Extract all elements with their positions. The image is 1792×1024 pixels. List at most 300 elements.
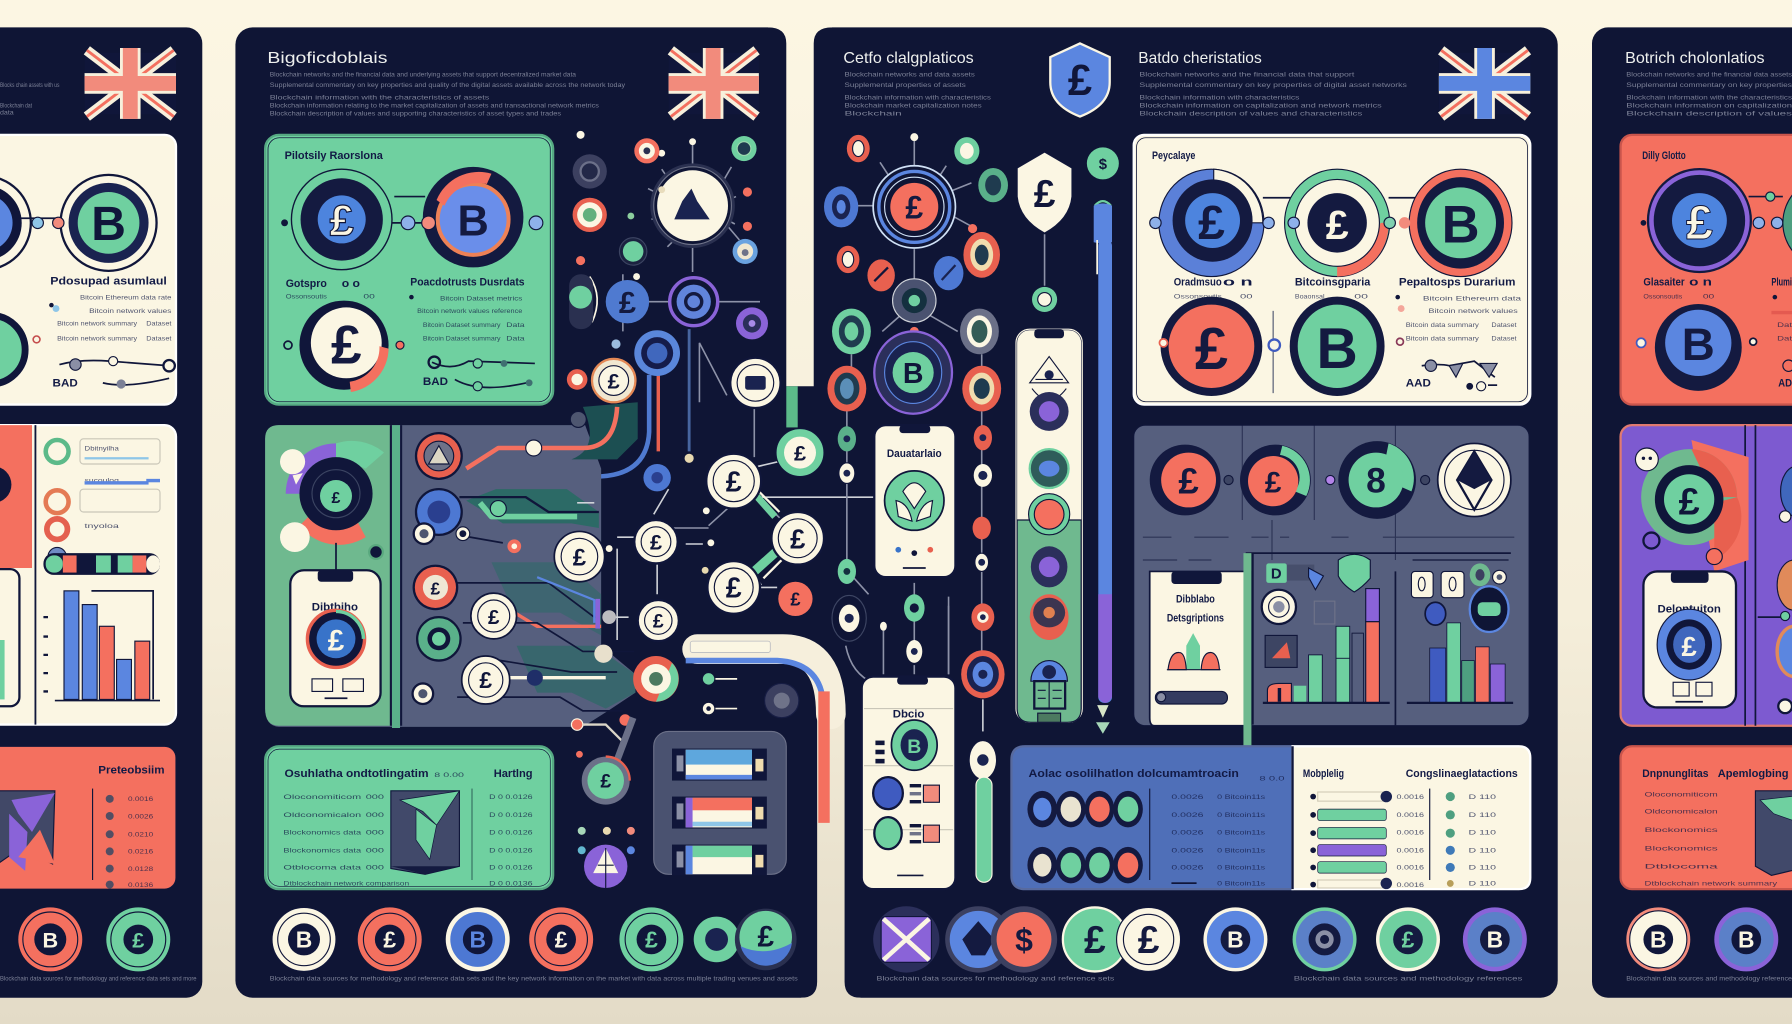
coin: green pill bbox=[569, 274, 597, 329]
rows: Dtblockchain network summary bbox=[1645, 881, 1778, 888]
coin: purple bbox=[1463, 907, 1527, 971]
title: Pilotsily Raorslona bbox=[285, 150, 383, 162]
coin: blue pound bbox=[291, 169, 392, 270]
cream value columns: D 110 bbox=[1469, 794, 1496, 801]
heading: table: 8 0.0 bbox=[1259, 776, 1285, 783]
connector: tail bbox=[571, 714, 633, 760]
coin: sat green L bbox=[832, 309, 871, 354]
coin: cream low: £ bbox=[479, 667, 492, 693]
text: sheet B left intro: Blockchain information with characteristics bbox=[845, 94, 991, 101]
coin bbox=[446, 907, 510, 971]
panel: cream coins bbox=[0, 135, 176, 405]
dots grid bbox=[578, 827, 635, 854]
phone: sheet B central bbox=[874, 425, 955, 577]
phone: Dibblabo bbox=[1176, 593, 1215, 605]
cube icon bbox=[0, 791, 55, 871]
nodes: around hub bbox=[627, 138, 752, 231]
strip: green channel end bbox=[786, 386, 798, 427]
text: coin labels: Ossonsoutis bbox=[1174, 293, 1222, 300]
panel: coral coins bbox=[1621, 135, 1792, 405]
text: sheet B right intro: Supplemental commentary on key properties of digital asset networks bbox=[1139, 82, 1407, 89]
text: sheet B left intro: Supplemental properties of assets bbox=[845, 82, 966, 89]
coin: green s: $ bbox=[1099, 157, 1108, 173]
panel: server stack bbox=[654, 731, 786, 875]
list rows bbox=[46, 439, 160, 566]
phone: sheet B lower bbox=[862, 677, 955, 889]
icons on tall phone bbox=[1029, 357, 1070, 722]
coin: small bbox=[1643, 533, 1722, 565]
text: sheet B left intro: Blockchain networks and data assets bbox=[845, 72, 975, 79]
connector bbox=[1641, 192, 1783, 229]
cream value columns: 0.0016 bbox=[1397, 794, 1424, 801]
text: sheet B right intro: Blockchain information with characteristics bbox=[1139, 94, 1299, 101]
cream bars bbox=[1310, 791, 1392, 889]
table right: D 0 0.0126 bbox=[489, 848, 533, 855]
coin: blue bbox=[416, 489, 462, 535]
panel: right cropped sheet bbox=[1592, 27, 1792, 998]
mini flow: BAD bbox=[53, 377, 78, 389]
text: labels: Dat bbox=[1777, 336, 1792, 343]
table left: 000 bbox=[366, 848, 384, 855]
icon: shield small bbox=[1017, 152, 1072, 233]
table left: Blockonomics data bbox=[283, 829, 361, 836]
text: sheet B left intro: Blockchain market capitalization notes bbox=[845, 102, 982, 109]
coin: purple green big bbox=[874, 331, 952, 414]
table right: D 0 0.0126 bbox=[489, 865, 533, 872]
text: left sheet intro: Blocks chain assets with us bbox=[0, 82, 59, 89]
phone: dial: £ bbox=[328, 624, 345, 657]
cream value columns: 0.0016 bbox=[1397, 848, 1424, 855]
phone bbox=[1643, 571, 1736, 707]
coin: coral: $ bbox=[1015, 922, 1033, 958]
phone list bbox=[873, 720, 939, 875]
coin: blue bitcoin: B bbox=[1682, 319, 1715, 370]
table rows: 0.0210 bbox=[128, 832, 153, 839]
table right: D 0 0.0126 bbox=[489, 812, 533, 819]
table blue rows: 0.0026 bbox=[1171, 812, 1204, 819]
nodes: vertical right bbox=[974, 425, 992, 487]
text: coin labels: Boaonsal bbox=[1295, 293, 1325, 300]
coin: cream dark pound: £ bbox=[1326, 202, 1349, 248]
text: sheet A intro: Supplemental commentary on key properties and quality of the digital assets available across the network today bbox=[270, 82, 626, 89]
bar chart: B left bbox=[1243, 553, 1511, 747]
phone: tall bbox=[1016, 329, 1082, 722]
coin: cream low bbox=[462, 656, 510, 704]
phone: sheet B lower: Dbcio bbox=[893, 709, 924, 721]
title: Osuhlatha ondtotlingatim bbox=[285, 768, 429, 780]
coin: purple green big: B bbox=[903, 358, 923, 390]
coin group bottom bbox=[1027, 847, 1143, 883]
text: right sheet intro: Blockchain information with the characteristics bbox=[1626, 94, 1792, 101]
text: labels: 00 bbox=[1703, 293, 1715, 300]
table left: Blockonomics data bbox=[283, 848, 361, 855]
mini flow: AAD bbox=[1406, 377, 1431, 389]
title bbox=[285, 768, 533, 780]
text: coin labels: 00 bbox=[363, 293, 375, 300]
coin: center left: £ bbox=[650, 530, 662, 555]
coin: blue pound bbox=[1159, 169, 1264, 277]
coin: blue pound: £ bbox=[330, 197, 354, 245]
coin: green vault bbox=[1338, 441, 1416, 519]
nodes: below pipe bbox=[703, 673, 737, 714]
footer: sheet A: Blockchain data sources for methodology and reference data sets and the key network information on the market with data across multiple trading venues and assets bbox=[270, 976, 798, 983]
coin: blue pound: £ bbox=[1198, 197, 1225, 250]
table left: 000 bbox=[366, 812, 384, 819]
text: coin details: Bitcoin network summary bbox=[57, 321, 138, 328]
rows: Dtblocoma bbox=[1645, 864, 1718, 871]
coin: cream A: £ bbox=[573, 545, 587, 572]
text: sheet B right intro: Blockchain description of values and characteristics bbox=[1139, 110, 1362, 117]
table left: 000 bbox=[366, 829, 384, 836]
text: coin labels: o o bbox=[342, 278, 360, 290]
rows bbox=[1645, 792, 1778, 888]
coin: blue leaf bbox=[945, 906, 1011, 973]
flag: sheet A bbox=[669, 48, 759, 119]
coin: blue ring bbox=[1293, 907, 1357, 971]
bar: lower green vertical bbox=[969, 699, 997, 882]
panel: left cropped sheet bbox=[0, 27, 202, 998]
text: sheet B right intro: Blockchain networks and the financial data that support bbox=[1139, 72, 1355, 79]
coin: blue B: B bbox=[1227, 926, 1244, 952]
coin: blue B bbox=[1203, 907, 1267, 971]
text: coin labels: Data bbox=[506, 336, 525, 343]
sheet: centre double panel bbox=[235, 11, 1558, 1024]
speech bubbles bbox=[280, 449, 383, 559]
coin: red dot bbox=[567, 369, 587, 390]
heading: table: Mobplelig bbox=[1303, 768, 1344, 780]
text: right sheet intro: Blockchain networks and the financial data assets bbox=[1626, 72, 1792, 79]
coin: navy eye bbox=[832, 595, 866, 641]
footer: left: Blockchain data sources for methodology and reference data sets and more bbox=[0, 976, 197, 983]
coin: blue pound: £ bbox=[619, 285, 636, 320]
text: labels bbox=[1643, 277, 1792, 343]
text: coin labels: 00 bbox=[1240, 293, 1253, 300]
coin: £ bbox=[555, 926, 568, 952]
coin: coral: £ bbox=[790, 589, 801, 610]
title: Dilly Glotto bbox=[1642, 150, 1686, 162]
coin: coral pound: £ bbox=[1195, 315, 1228, 382]
coin: slate dial bbox=[765, 683, 799, 718]
coins: sheet A bottom row bbox=[272, 907, 797, 971]
coin: coral bbox=[991, 906, 1057, 973]
heading: table bbox=[1029, 768, 1518, 783]
coin: green pound bbox=[776, 429, 824, 477]
pipe: cream curved with stripes bbox=[686, 641, 831, 823]
bar chart: B right bbox=[1407, 560, 1513, 703]
heading: right sheet: Botrich cholonlatios bbox=[1625, 50, 1765, 67]
table left: Oloconomiticom bbox=[283, 794, 362, 801]
nodes bbox=[1224, 475, 1430, 485]
coin: green: £ bbox=[1402, 926, 1415, 952]
rows: Blockonomics bbox=[1645, 845, 1719, 852]
panel: lower left split bbox=[0, 425, 176, 725]
phone: sheet B central: Dauatarlaio bbox=[887, 448, 942, 460]
heading: sheet A: Bigoficdoblais bbox=[267, 50, 387, 67]
coin: coral: £ bbox=[431, 578, 441, 598]
title: Apemlogbing bbox=[1718, 768, 1789, 780]
coin: coral pound: £ bbox=[1178, 461, 1199, 502]
cream value columns bbox=[1397, 789, 1496, 889]
coin: coral triangle bbox=[415, 432, 463, 480]
coin: red small bbox=[507, 539, 521, 553]
title bbox=[1642, 768, 1789, 780]
coin: lower pound bbox=[707, 561, 760, 614]
text: sheet A intro bbox=[270, 72, 626, 117]
coin: coral green B bbox=[1409, 169, 1512, 277]
coin: lower ring bbox=[633, 656, 679, 702]
coin: blue s bbox=[634, 330, 680, 376]
coin: coral bbox=[778, 582, 813, 616]
text: coin labels: Ossonsoutis bbox=[286, 293, 327, 300]
table blue rows: 0.0026 bbox=[1171, 848, 1204, 855]
table blue rows: 0.0026 bbox=[1171, 865, 1204, 872]
table right bbox=[472, 789, 533, 888]
panel: slate pipeline bbox=[265, 402, 694, 728]
table left bbox=[283, 794, 409, 888]
coin: slate center bbox=[893, 279, 936, 322]
cream value columns: D 110 bbox=[1469, 865, 1496, 872]
coin: green bitcoin bbox=[1269, 301, 1403, 392]
coin: green s bbox=[1087, 147, 1119, 179]
coin: £ bbox=[645, 926, 658, 952]
panel: blue and cream table bbox=[1011, 746, 1530, 889]
bar chart: left sheet bbox=[46, 591, 160, 701]
coin: sat coral bbox=[847, 135, 870, 162]
text: coin details: Bitcoin Ethereum data rate bbox=[80, 294, 172, 301]
thick links bbox=[754, 491, 784, 578]
coin: purple pound: £ bbox=[1686, 197, 1713, 250]
panel: green coins bbox=[265, 135, 553, 405]
bar: blue vertical bbox=[1094, 201, 1112, 734]
coin: coral green B: B bbox=[1442, 195, 1480, 254]
coin: sat coral 3 bbox=[867, 259, 895, 291]
text: labels: Glasaiter bbox=[1643, 277, 1685, 289]
text: coin labels: Gotspro bbox=[286, 278, 327, 290]
coin: sat coral large bbox=[963, 232, 1000, 278]
coin: coral bbox=[413, 565, 458, 610]
coin: sat slate R bbox=[960, 309, 999, 354]
coin: coral pound bbox=[1150, 445, 1221, 515]
mini flow bbox=[53, 357, 175, 389]
table left: 000 bbox=[366, 865, 384, 872]
panel: cream coins B bbox=[1134, 135, 1530, 405]
panel: coral table right bbox=[1621, 746, 1792, 889]
coin: blue bitcoin bbox=[423, 167, 523, 267]
coin group top bbox=[1027, 791, 1143, 827]
text: coin labels: Oradmsuo bbox=[1174, 277, 1222, 289]
cream value columns: 0.0016 bbox=[1397, 865, 1424, 872]
coin bbox=[358, 907, 422, 971]
coin: center right: £ bbox=[790, 524, 805, 555]
panel: left coral table bbox=[0, 746, 176, 889]
network: central coins bbox=[577, 429, 874, 702]
title: 8 0.00 bbox=[434, 772, 464, 779]
coin: coral pound bbox=[1159, 301, 1258, 392]
coin: cream pound: £ bbox=[1138, 919, 1160, 962]
cube icon bbox=[391, 791, 459, 874]
text: labels: Ossonsoutis bbox=[1643, 293, 1683, 300]
table blue rows: 0 Bitcoin11s bbox=[1217, 865, 1266, 872]
speech bubble bbox=[1635, 448, 1658, 471]
nodes: vertical lower bbox=[838, 517, 991, 584]
text: sheet A intro: Blockchain information with the characteristics of assets bbox=[270, 94, 489, 101]
coin: blue bitcoin bbox=[1637, 304, 1792, 391]
table rows: 0.0136 bbox=[128, 882, 153, 889]
text: coin labels: Bitcoinsgparia bbox=[1295, 277, 1371, 289]
divider vertical bbox=[1394, 571, 1396, 726]
coin: green bitcoin bbox=[21, 175, 157, 271]
coin: coral blue large bbox=[961, 650, 1005, 698]
flag: blue bbox=[1439, 48, 1530, 119]
mini flow bbox=[1406, 360, 1497, 391]
table blue rows: 0 Bitcoin11s bbox=[1217, 881, 1266, 888]
table blue rows bbox=[1150, 789, 1266, 888]
heading: table: Congslinaeglatactions bbox=[1406, 768, 1518, 780]
traces bbox=[451, 407, 634, 711]
coin: purple pound bbox=[1647, 168, 1752, 273]
coin: big cream pound: £ bbox=[331, 313, 362, 375]
server 1 bbox=[672, 749, 767, 781]
coin: green top trace bbox=[490, 501, 506, 517]
node: ring bbox=[414, 523, 470, 544]
connectors bbox=[1263, 197, 1417, 199]
list rows: tnyoloa bbox=[85, 523, 119, 530]
coin: satellite coral bbox=[634, 138, 659, 163]
icon: shield pound bbox=[1050, 43, 1110, 117]
text: right sheet intro: Blockchain information on capitalization bbox=[1626, 102, 1792, 109]
divider bbox=[1272, 311, 1274, 393]
nodes: sheet B hub satellites bbox=[910, 133, 977, 336]
text: coin labels: Dataset bbox=[1491, 322, 1517, 329]
coin bbox=[694, 917, 739, 962]
table right: D 0 0.0126 bbox=[489, 794, 533, 801]
table rows: 0.0128 bbox=[128, 866, 153, 873]
text: coin details: Pdosupad asumlaul bbox=[50, 276, 167, 288]
coin: partial right bbox=[1783, 177, 1792, 269]
text: coin labels: Data bbox=[506, 322, 525, 329]
coin: green vault: 8 bbox=[1366, 461, 1386, 501]
coin: blue pound bbox=[606, 280, 649, 323]
coin: purple bbox=[670, 278, 718, 326]
table blue rows: 0 Bitcoin11s bbox=[1217, 829, 1266, 836]
coin: green bbox=[417, 617, 461, 661]
text: coin labels: Poacdotrusts Dusrdats bbox=[410, 277, 525, 289]
panel: purple dashboard bbox=[1621, 425, 1792, 726]
coin: sat green right bbox=[978, 168, 1008, 202]
text: left sheet intro: Blockchain dat bbox=[0, 102, 32, 109]
coin: coral R bbox=[962, 366, 1001, 411]
links bbox=[577, 451, 874, 640]
table rows: 0.0026 bbox=[128, 813, 153, 820]
text: coin details: Bitcoin network values bbox=[89, 308, 172, 315]
coin: bottom left coral bbox=[18, 907, 82, 971]
coral block bbox=[0, 425, 32, 568]
text: coin labels: Bitcoin Dataset summary bbox=[423, 322, 501, 329]
text: right sheet intro: Supplemental commentary on key properties bbox=[1626, 82, 1792, 89]
text: coin labels bbox=[286, 277, 525, 343]
coin: sat green bbox=[954, 137, 979, 165]
phone: Delontuiton bbox=[1657, 604, 1721, 616]
coin: hub bbox=[650, 163, 735, 248]
table right: D 0 0.0136 bbox=[489, 881, 533, 888]
text: left sheet intro: data bbox=[0, 109, 14, 116]
mini flow: BAD bbox=[423, 376, 448, 388]
coin: satellite slate bbox=[573, 154, 607, 189]
coral dial partial bbox=[0, 466, 11, 503]
panel: slate dashboard B bbox=[1134, 425, 1529, 747]
nodes: lower column bbox=[880, 603, 994, 663]
list rows: Dbitnyilha bbox=[85, 445, 119, 452]
text: coin details: Dataset bbox=[146, 321, 172, 328]
panel: left coral table: Preteobsiim bbox=[98, 765, 165, 777]
text: coin labels: 00 bbox=[1354, 293, 1368, 300]
cream value columns: 0.0016 bbox=[1397, 829, 1424, 836]
coin: green bitcoin: B bbox=[1317, 317, 1358, 381]
node: blue dot bbox=[611, 339, 621, 349]
table blue rows: 0 Bitcoin11s bbox=[1217, 812, 1266, 819]
list rows: sucoulog bbox=[85, 477, 119, 484]
table blue rows: 0 Bitcoin11s bbox=[1217, 794, 1266, 801]
coin: coral dagger: £ bbox=[1265, 467, 1282, 500]
coin: bottom left green: £ bbox=[132, 927, 144, 952]
table blue rows: 0 Bitcoin11s bbox=[1217, 848, 1266, 855]
heading: sheet B left: Cetfo clalgplaticos bbox=[843, 50, 974, 67]
coin: sat coral 2 bbox=[837, 246, 859, 273]
network: sheet A links bbox=[623, 142, 800, 537]
coin: green bbox=[1376, 907, 1440, 971]
title: Peycalaye bbox=[1152, 150, 1195, 162]
text: coin details bbox=[49, 276, 172, 343]
flag: left sheet bbox=[85, 48, 176, 119]
node: pipe joints bbox=[526, 411, 694, 463]
icon: shield pound: £ bbox=[1068, 57, 1092, 105]
phone bbox=[1150, 571, 1251, 726]
phone: £ bbox=[1682, 631, 1697, 662]
channel: bottom cream gap bbox=[801, 697, 861, 1024]
panel: green table bbox=[265, 746, 553, 889]
coins: sheet B bottom row bbox=[873, 906, 1527, 973]
coin: B bbox=[469, 926, 486, 952]
coins: right edge bbox=[1758, 466, 1792, 713]
pipes: vertical blue and coral bbox=[469, 329, 689, 480]
footer: sheet B right: Blockchain data sources and methodology references bbox=[1294, 976, 1522, 983]
cream value columns: 0.0016 bbox=[1397, 812, 1424, 819]
coin: right bottom purple: B bbox=[1738, 926, 1755, 952]
server 2 bbox=[672, 797, 767, 829]
coin: bottom left green bbox=[106, 907, 170, 971]
text: sheet A intro: Blockchain information relating to the market capitalization of assets and transactional network metrics bbox=[270, 102, 599, 109]
coin: lower left bbox=[638, 600, 679, 641]
coin: cream mid bbox=[471, 593, 517, 639]
text: sheet A intro: Blockchain networks and the financial data and underlying assets that support decentralized market data bbox=[270, 72, 577, 79]
text: coin labels: Bitcoin network values bbox=[1429, 308, 1518, 315]
connector nodes bbox=[32, 217, 64, 229]
coin: center right bbox=[771, 512, 824, 565]
phone: Detsgriptions bbox=[1167, 613, 1224, 625]
donut bbox=[1641, 440, 1749, 571]
coin: green bitcoin: B bbox=[91, 198, 126, 251]
text: coin labels: Bitcoin data summary bbox=[1406, 336, 1479, 343]
table left: 000 bbox=[366, 794, 384, 801]
rows: Oldconomicalon bbox=[1645, 809, 1718, 816]
table blue rows: 0.0026 bbox=[1171, 794, 1204, 801]
text: labels: o n bbox=[1689, 277, 1712, 289]
coin: cream pound: £ bbox=[608, 369, 620, 394]
connector bbox=[392, 197, 425, 223]
coin: B bbox=[296, 926, 312, 952]
coin: £ bbox=[383, 926, 396, 952]
table left: Otblocoma data bbox=[283, 865, 361, 872]
